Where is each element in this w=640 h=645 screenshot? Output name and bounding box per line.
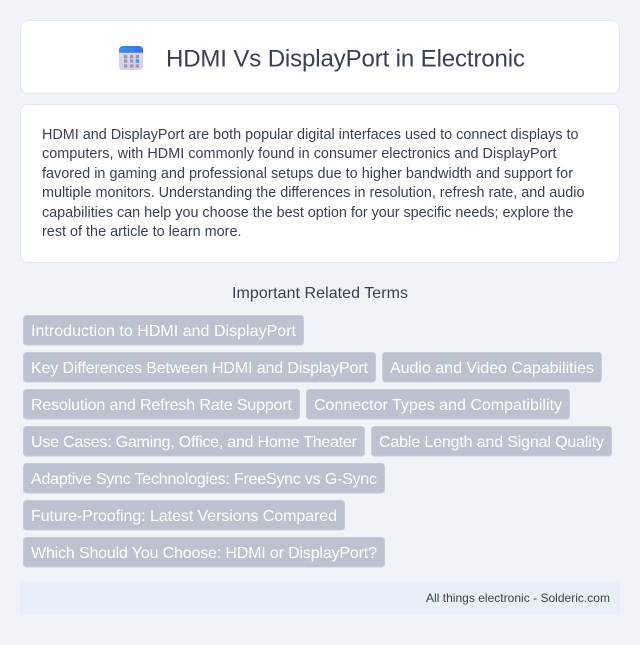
text block: introduction paragraph: capabilities can help you choose the best option for your specific needs; explore the xyxy=(42,205,574,221)
panel: introduction xyxy=(20,104,620,262)
panel: related term tags xyxy=(24,316,612,567)
tag xyxy=(306,390,570,419)
tag: Cable Length and Signal Quality xyxy=(379,434,604,451)
text block: introduction paragraph: favored in gaming and professional setups due to higher bandwidth and support for xyxy=(42,166,573,182)
panel: header xyxy=(20,20,620,94)
tag: Adaptive Sync Technologies: FreeSync vs G-Sync xyxy=(31,471,377,488)
tag xyxy=(372,426,612,456)
tag: Future-Proofing: Latest Versions Compared xyxy=(31,508,337,525)
tag xyxy=(24,352,376,382)
tag: Introduction to HDMI and DisplayPort xyxy=(31,323,297,340)
icon: calendar grid xyxy=(119,46,143,70)
tag: Resolution and Refresh Rate Support xyxy=(31,397,293,414)
tag xyxy=(24,464,384,493)
tag: Which Should You Choose: HDMI or DisplayPort? xyxy=(31,545,377,562)
tag xyxy=(24,538,384,567)
footer xyxy=(20,581,620,615)
title: HDMI Vs DisplayPort in Electronic xyxy=(166,46,525,72)
text block: introduction paragraph: multiple monitors. Understanding the differences in resolution, refresh rate, and audio xyxy=(42,185,584,201)
tag xyxy=(382,352,602,382)
text block: introduction paragraph xyxy=(42,127,584,240)
text block: introduction paragraph: rest of the article to learn more. xyxy=(42,224,242,240)
text block: introduction paragraph: computers, with HDMI commonly found in consumer electronics and DisplayPort xyxy=(42,146,556,162)
footer: All things electronic - Solderic.com xyxy=(426,591,610,605)
heading: related terms: Important Related Terms xyxy=(232,285,408,302)
tag xyxy=(24,316,304,345)
tag xyxy=(24,426,364,456)
tag: Connector Types and Compatibility xyxy=(314,397,562,414)
tag xyxy=(24,500,344,530)
tag xyxy=(24,390,300,419)
tag: Audio and Video Capabilities xyxy=(390,360,594,377)
tag: Key Differences Between HDMI and DisplayPort xyxy=(31,360,369,377)
tag: Use Cases: Gaming, Office, and Home Theater xyxy=(31,434,358,451)
text block: introduction paragraph: HDMI and DisplayPort are both popular digital interfaces used to connect displays to xyxy=(42,127,578,143)
